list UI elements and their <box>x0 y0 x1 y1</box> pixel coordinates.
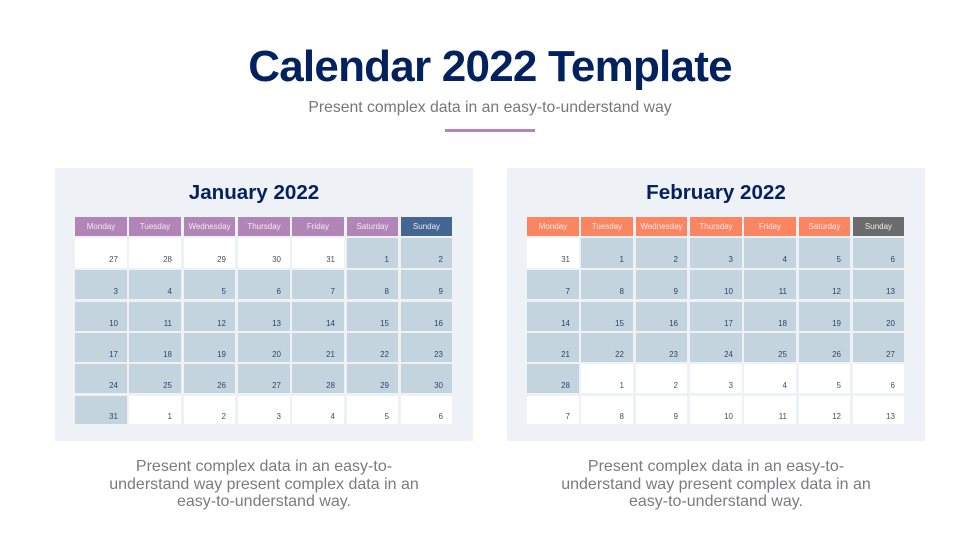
February date grid: 22 <box>615 350 624 359</box>
January date grid: 4 <box>331 412 335 421</box>
January date grid: 30 <box>272 255 281 264</box>
January date grid: 13 <box>272 319 281 328</box>
January date grid: 15 <box>380 319 389 328</box>
January date grid: 1 <box>385 255 389 264</box>
February date grid: 19 <box>832 319 841 328</box>
January date grid: 11 <box>164 319 172 328</box>
February date grid: 1 <box>620 255 624 264</box>
February date grid: 11 <box>779 287 787 296</box>
February date grid: 7 <box>566 287 570 296</box>
January date grid: 9 <box>439 287 443 296</box>
January date grid: 24 <box>109 381 118 390</box>
January weekday header: Sunday <box>413 222 440 231</box>
January date grid: 21 <box>326 350 335 359</box>
February date grid: 4 <box>783 255 787 264</box>
February weekday header: Friday <box>759 222 781 231</box>
January date grid: 31 <box>326 255 335 264</box>
January date grid: 28 <box>163 255 172 264</box>
January date grid: 19 <box>217 350 226 359</box>
panel: January 2022 calendar <box>55 168 473 441</box>
February date grid: 4 <box>783 381 787 390</box>
February weekday header: Thursday <box>699 222 733 231</box>
January date grid: 5 <box>385 412 389 421</box>
February date grid: 10 <box>724 412 733 421</box>
January date grid: 22 <box>380 350 389 359</box>
January date grid: 14 <box>326 319 335 328</box>
January weekday header: Monday <box>87 222 115 231</box>
January date grid: 18 <box>163 350 172 359</box>
February description: understand way present complex data in an <box>561 476 871 492</box>
February date grid: 31 <box>561 255 570 264</box>
January date grid: 12 <box>217 319 226 328</box>
January weekday header: Saturday <box>356 222 389 231</box>
January date grid: 27 <box>109 255 118 264</box>
February date grid: 13 <box>886 287 895 296</box>
January date grid: 3 <box>277 412 281 421</box>
February date grid: 24 <box>724 350 733 359</box>
January heading: January 2022 <box>189 181 319 204</box>
February weekday header: Tuesday <box>592 222 622 231</box>
February date grid: 7 <box>566 412 570 421</box>
January weekday header <box>75 217 452 236</box>
February date grid: 16 <box>669 319 678 328</box>
February date grid: 12 <box>832 287 841 296</box>
February date grid: 13 <box>886 412 895 421</box>
February date grid: 28 <box>561 381 570 390</box>
title: Calendar 2022 Template <box>248 42 732 91</box>
January date grid: 30 <box>434 381 443 390</box>
January date grid: 29 <box>380 381 389 390</box>
February date grid: 2 <box>674 255 678 264</box>
February date grid: 10 <box>724 287 733 296</box>
February date grid: 8 <box>620 287 624 296</box>
January weekday header: Thursday <box>247 222 281 231</box>
February date grid: 2 <box>674 381 678 390</box>
February date grid: 9 <box>674 412 678 421</box>
February weekday header: Wednesday <box>640 222 683 231</box>
January description: Present complex data in an easy-to- <box>136 458 392 475</box>
January weekday header: Tuesday <box>140 222 170 231</box>
February date grid: 14 <box>561 319 570 328</box>
February date grid: 27 <box>886 350 895 359</box>
January date grid: 8 <box>385 287 389 296</box>
January date grid: 4 <box>168 287 172 296</box>
January date grid: 3 <box>114 287 118 296</box>
subtitle: Present complex data in an easy-to-understand way <box>308 99 672 116</box>
January date grid: 31 <box>109 412 118 421</box>
February date grid: 26 <box>832 350 841 359</box>
February date grid: 1 <box>620 381 624 390</box>
January date grid: 23 <box>434 350 443 359</box>
January date grid: 26 <box>217 381 226 390</box>
February date grid: 6 <box>891 255 895 264</box>
February description: easy-to-understand way. <box>629 493 803 510</box>
January date grid: 2 <box>222 412 226 421</box>
February date grid: 25 <box>778 350 787 359</box>
January date grid: 10 <box>109 319 118 328</box>
panel: February 2022 calendar <box>507 168 925 441</box>
February date grid: 8 <box>620 412 624 421</box>
February date grid: 18 <box>778 319 787 328</box>
January date grid: 2 <box>439 255 443 264</box>
February date grid: 21 <box>561 350 570 359</box>
January weekday header: Wednesday <box>188 222 231 231</box>
January date grid <box>75 238 452 424</box>
January description <box>109 458 419 510</box>
February weekday header: Monday <box>539 222 567 231</box>
February date grid: 5 <box>837 381 841 390</box>
February date grid: 11 <box>779 412 787 421</box>
February date grid: 20 <box>886 319 895 328</box>
February date grid: 23 <box>669 350 678 359</box>
January description: understand way present complex data in an <box>109 476 419 492</box>
January date grid: 27 <box>272 381 281 390</box>
February weekday header <box>527 217 904 236</box>
February date grid <box>527 238 904 424</box>
February description <box>561 458 871 510</box>
January date grid: 20 <box>272 350 281 359</box>
February description: Present complex data in an easy-to- <box>588 458 844 475</box>
January date grid: 17 <box>109 350 118 359</box>
February date grid: 3 <box>729 255 733 264</box>
January date grid: 6 <box>439 412 443 421</box>
January description: easy-to-understand way. <box>177 493 351 510</box>
January date grid: 16 <box>434 319 443 328</box>
February date grid: 5 <box>837 255 841 264</box>
title underline accent <box>445 129 535 132</box>
February date grid: 3 <box>729 381 733 390</box>
February date grid: 12 <box>832 412 841 421</box>
January date grid: 25 <box>163 381 172 390</box>
January weekday header: Friday <box>307 222 329 231</box>
January date grid: 6 <box>277 287 281 296</box>
February date grid: 6 <box>891 381 895 390</box>
February date grid: 9 <box>674 287 678 296</box>
February date grid: 15 <box>615 319 624 328</box>
January date grid: 5 <box>222 287 226 296</box>
February date grid: 17 <box>724 319 733 328</box>
February weekday header: Saturday <box>808 222 841 231</box>
February weekday header: Sunday <box>865 222 892 231</box>
January date grid: 1 <box>168 412 172 421</box>
January date grid: 29 <box>217 255 226 264</box>
January date grid: 28 <box>326 381 335 390</box>
January date grid: 7 <box>331 287 335 296</box>
February heading: February 2022 <box>646 181 786 204</box>
